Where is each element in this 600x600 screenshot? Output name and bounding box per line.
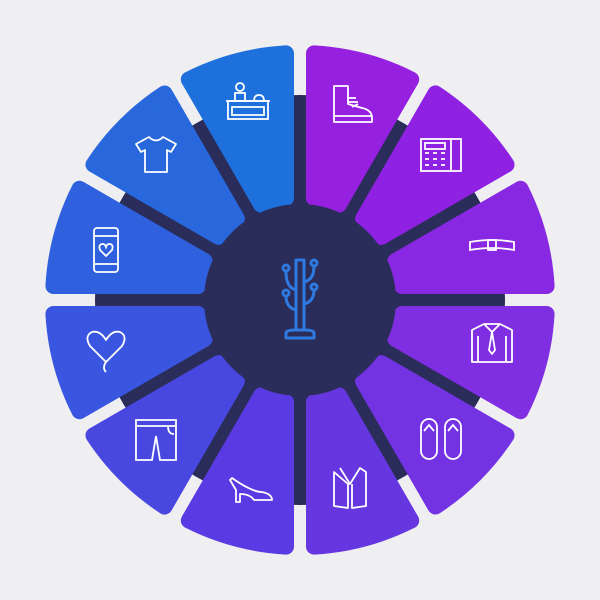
icon: t-shirt (136, 137, 176, 172)
icon: shorts (136, 420, 176, 460)
icon: office phone (421, 139, 461, 171)
icon: reception desk (226, 83, 270, 119)
icon: flip flops (421, 419, 461, 459)
icon: coat rack (283, 260, 317, 338)
icon: vest (334, 468, 366, 508)
icon: high heel shoe (230, 478, 272, 502)
icon: boot (334, 86, 372, 122)
icon: heart balloon (87, 332, 125, 372)
segments ring (48, 48, 552, 552)
center hub (204, 204, 396, 396)
icon: shirt with tie (472, 324, 512, 362)
icon: belt (470, 240, 514, 250)
navy base disc (95, 95, 505, 505)
icon: mobile with heart (94, 228, 118, 272)
